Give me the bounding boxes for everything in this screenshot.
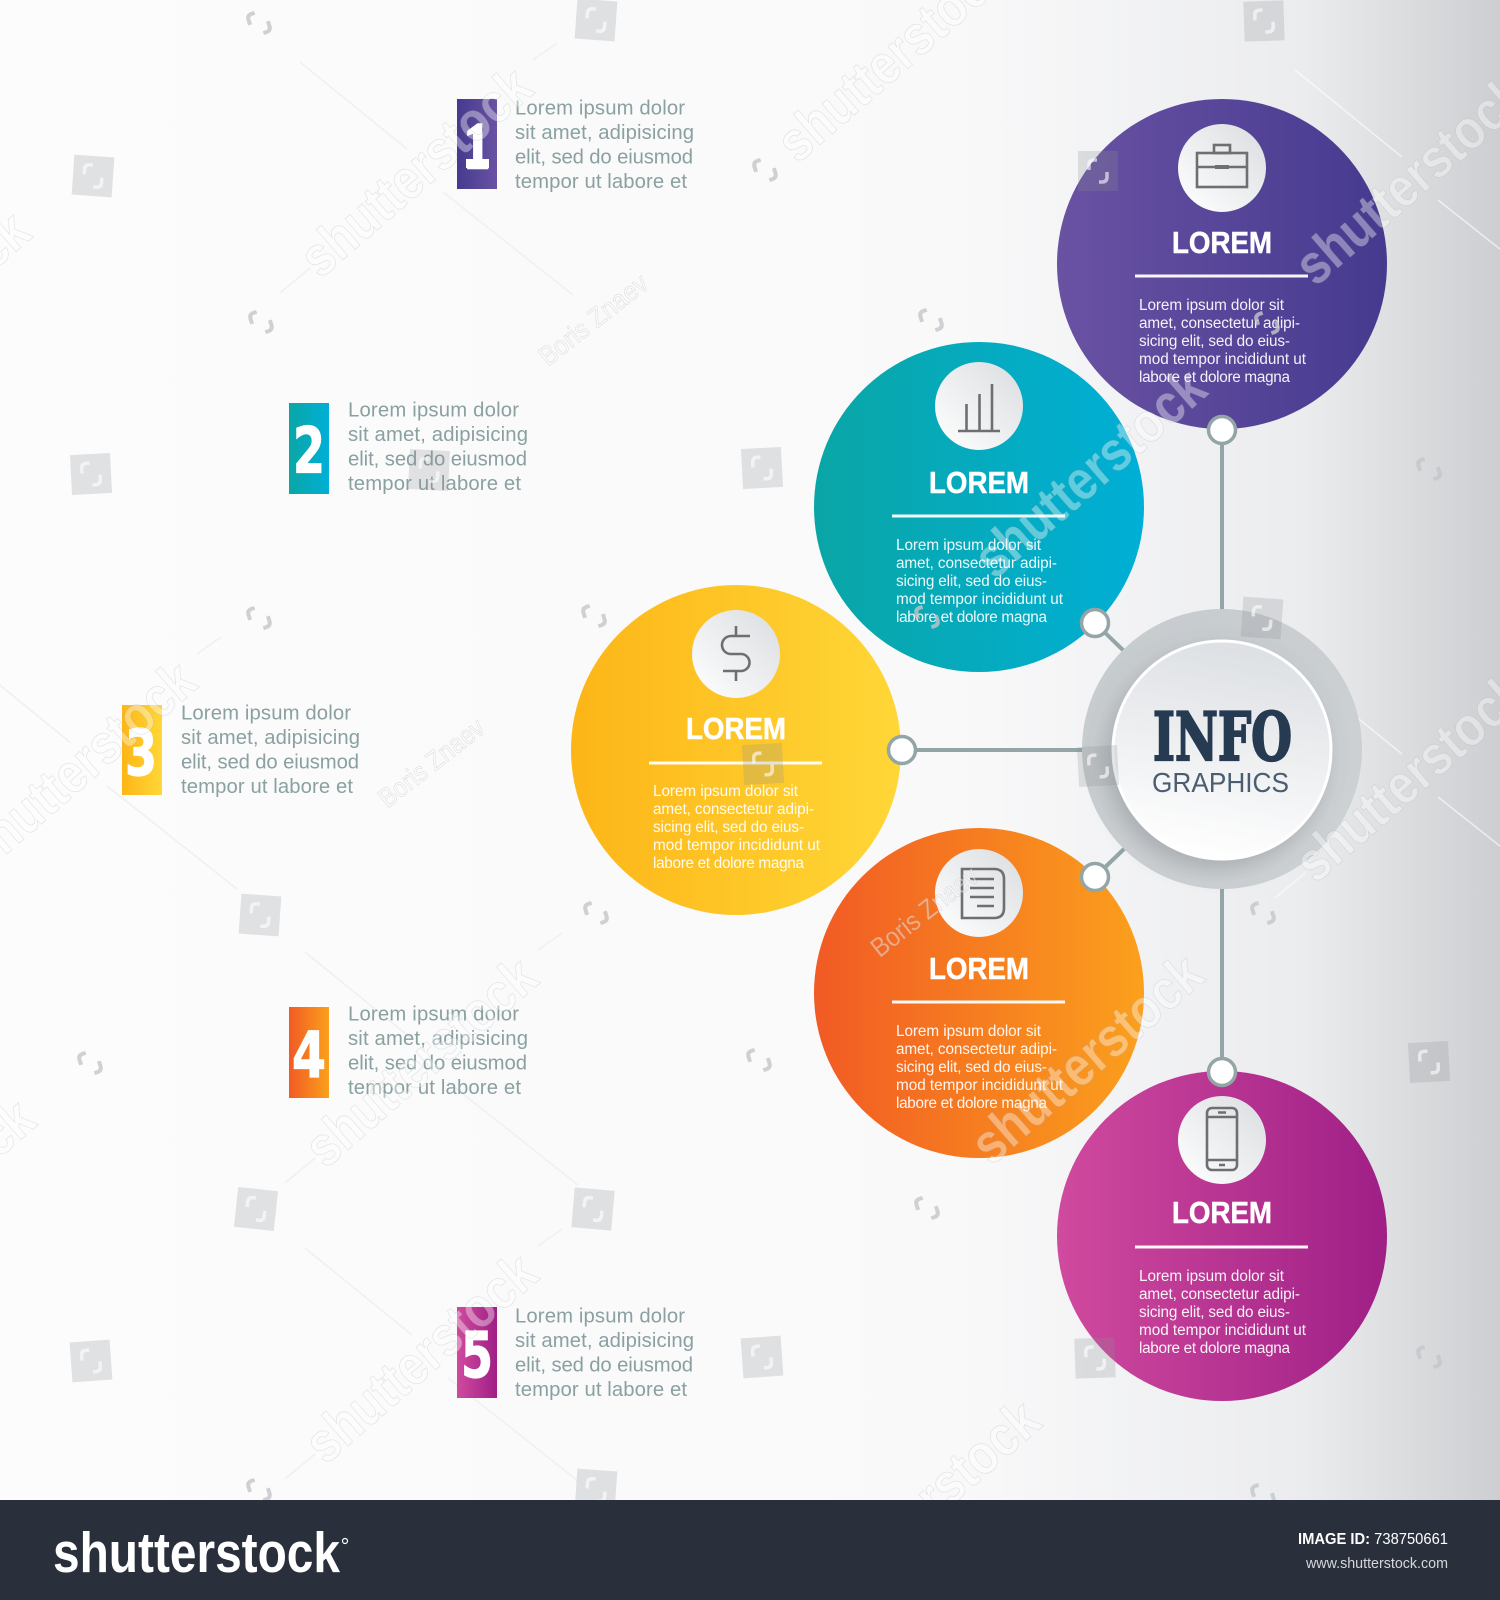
body text: mod tempor incididunt ut [896,1077,1064,1094]
list item 1 [457,98,694,193]
connector nodes [888,416,1236,1086]
item 2 text: Lorem ipsum dolor [348,400,519,422]
body text: amet, consectetur adipi- [1139,1286,1300,1303]
list item 5 [457,1306,694,1401]
hub subtitle: GRAPHICS: GRAPHICS [1152,767,1289,798]
body text: amet, consectetur adipi- [1139,315,1300,332]
list item 1: 1 [464,110,490,183]
panel: magenta circle [1057,1071,1387,1401]
item 5 text: sit amet, adipisicing [515,1330,694,1352]
body text: sicing elit, sed do eius- [1139,333,1290,350]
body text: Lorem ipsum dolor sit [896,537,1042,554]
item 2 text: elit, sed do eiusmod [348,448,527,470]
item 2 text: tempor ut labore et [348,473,521,495]
footer url: www.shutterstock.com [1305,1555,1448,1572]
heading: LOREM [929,951,1029,986]
panel: orange circle [814,828,1144,1158]
watermark text: Boris Znaev [533,268,654,372]
connector lines [902,430,1222,1072]
item 2 text [348,400,528,495]
heading: LOREM [1172,225,1272,260]
panel: purple circle [1057,99,1387,429]
body text: Lorem ipsum dolor sit [1139,297,1285,314]
list item 3: 3 [125,717,157,790]
body text: mod tempor incididunt ut [1139,351,1307,368]
body text: sicing elit, sed do eius- [653,819,804,836]
body text: mod tempor incididunt ut [1139,1322,1307,1339]
list item 4 [289,1004,528,1099]
panel: yellow circle [571,585,901,915]
item 4 text [348,1004,528,1099]
icon: phone [1178,1096,1266,1184]
item 5 text: tempor ut labore et [515,1379,687,1401]
item 4 text: elit, sed do eiusmod [348,1052,527,1074]
footer bar [0,1500,1500,1600]
body text: mod tempor incididunt ut [653,837,821,854]
item 1 text: elit, sed do eiusmod [515,146,693,168]
item 1 text: sit amet, adipisicing [515,122,694,144]
item 5 text: Lorem ipsum dolor [515,1306,685,1328]
watermark text: Boris Znaev [865,860,984,963]
watermark text: shutterstock [958,941,1215,1176]
body text: Lorem ipsum dolor sit [653,783,799,800]
item 1 text: Lorem ipsum dolor [515,98,685,120]
item 2 text: sit amet, adipisicing [348,424,528,446]
footer image id: IMAGE ID: 738750661 [1298,1531,1448,1548]
body text: labore et dolore magna [653,855,804,872]
item 5 text [515,1306,694,1401]
item 4 text: Lorem ipsum dolor [348,1004,519,1026]
heading: LOREM [1172,1195,1272,1230]
watermark text: shutterstock [292,1240,549,1475]
body text: labore et dolore magna [896,1095,1047,1112]
item 1 text: tempor ut labore et [515,171,687,193]
body text: sicing elit, sed do eius- [896,573,1047,590]
watermark text: shutterstock [292,944,549,1179]
body text: mod tempor incididunt ut [896,591,1064,608]
list item 5: 5 [461,1319,493,1392]
body text: amet, consectetur adipi- [896,1041,1057,1058]
footer logo: shutterstock [53,1521,340,1585]
watermark text: shutterstock [961,355,1218,590]
body text: labore et dolore magna [1139,1340,1290,1357]
body text: labore et dolore magna [896,609,1047,626]
item 3 text: sit amet, adipisicing [181,727,360,749]
body text: labore et dolore magna [1139,369,1290,386]
central hub [1082,609,1362,889]
hub title: INFO: INFO [1153,698,1292,776]
watermark text: shutterstock [287,54,544,289]
body text: sicing elit, sed do eius- [896,1059,1047,1076]
body text: Lorem ipsum dolor sit [896,1023,1042,1040]
heading: LOREM [686,711,786,746]
list item 2 [289,400,528,495]
item 3 text [181,702,360,798]
body text [1139,1268,1307,1357]
item 4 text: sit amet, adipisicing [348,1028,528,1050]
body text: Lorem ipsum dolor sit [1139,1268,1285,1285]
icon: dollar [692,610,780,698]
item 5 text: elit, sed do eiusmod [515,1354,693,1376]
footer registered mark [342,1538,348,1544]
body text: amet, consectetur adipi- [896,555,1057,572]
item 1 text [515,98,694,193]
body text [896,537,1064,626]
panel: teal circle [814,342,1144,672]
icon: document [935,849,1023,937]
watermark text: Boris Znaev [373,712,491,814]
body text [653,783,821,872]
body text: amet, consectetur adipi- [653,801,814,818]
item 3 text: tempor ut labore et [181,776,353,798]
list item 3 [122,702,360,798]
icon: bar chart [935,362,1023,450]
body text [896,1023,1064,1112]
item 3 text: elit, sed do eiusmod [181,752,359,774]
list item 4: 4 [292,1019,326,1092]
body text: sicing elit, sed do eius- [1139,1304,1290,1321]
item 4 text: tempor ut labore et [348,1077,521,1099]
list item 2: 2 [293,414,325,488]
heading: LOREM [929,465,1029,500]
item 3 text: Lorem ipsum dolor [181,702,351,724]
body text [1139,297,1307,386]
icon: briefcase [1178,124,1266,212]
